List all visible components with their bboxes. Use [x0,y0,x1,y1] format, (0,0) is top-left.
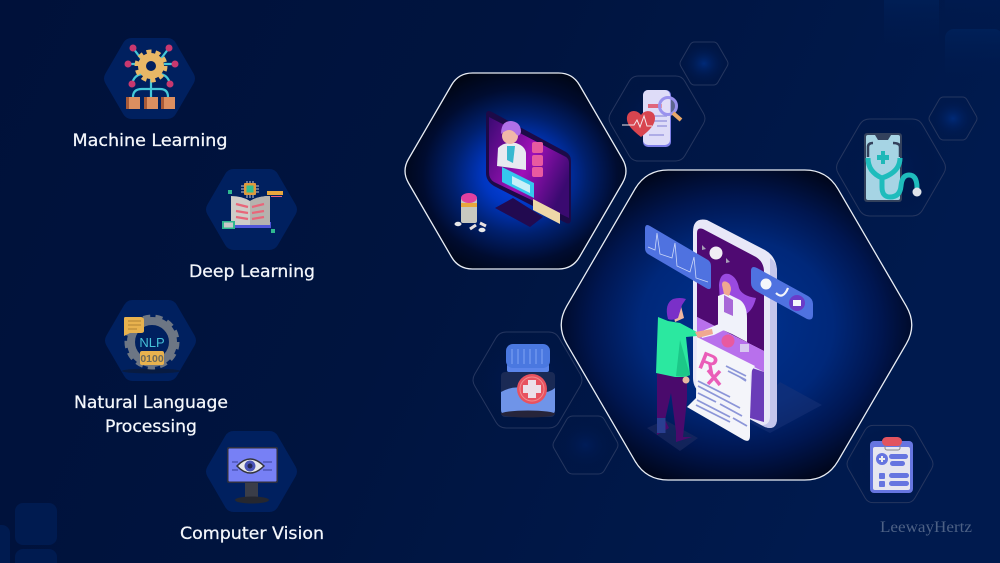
panel: deep learning [189,169,315,281]
icon: clipboard [870,437,913,493]
decorative tiles bottom left [0,503,57,563]
label: Computer Vision [180,524,324,543]
hexagon badge [206,431,297,512]
icon: book with chip [222,181,283,233]
small hexagon: medical report [609,76,705,161]
small hexagon: empty top [680,42,728,85]
roll inside [750,368,764,422]
patient figure [656,298,713,442]
small hexagon: empty lower [553,416,618,474]
label: second line: Processing [105,417,197,436]
label: first line: Natural Language [74,393,228,412]
floor shadow [745,382,822,433]
icon: monitor with eye [227,447,278,504]
icon: gear network [124,44,178,109]
icon: medicine bottle [501,344,555,418]
label: Deep Learning [189,262,315,281]
ECG card [645,225,711,289]
pill bottle and pills [454,193,486,232]
beige card [533,199,560,224]
small hexagon: medicine bottle [473,332,582,428]
prescription sheet [687,337,755,441]
small hexagon: empty right [929,97,977,140]
phone body [693,220,777,428]
panel: machine learning [72,38,228,150]
phone screen [697,228,764,351]
icon: report, heart and magnifier [622,90,681,147]
side icons [532,142,543,177]
cyan card [502,167,534,198]
doctor on phone [700,274,756,342]
doctor on screen [497,121,526,170]
person shadow [647,420,698,451]
small hexagon: clipboard [847,425,933,503]
call icons [722,334,749,352]
monitor screen [486,111,571,224]
large hexagon: telemedicine phone consultation [561,170,912,480]
small hexagon: stethoscope phone [837,119,945,216]
hexagon badge [104,38,195,119]
screen surface [489,117,569,218]
icon: phone with stethoscope [864,133,922,202]
decorative tiles top right [884,0,1000,82]
screen top icons [702,245,730,263]
monitor stand [495,198,543,227]
icon: NLP gear [122,317,180,374]
lavender call bar [697,317,764,372]
Rx mark: R [695,347,722,379]
phone side [762,258,777,428]
brand wordmark: LeewayHertz [880,519,972,536]
hexagon badge [206,169,297,250]
call controls card [751,267,813,320]
panel: computer vision [180,431,324,543]
label: Machine Learning [72,131,228,150]
icon: NLP gear: 0100 [140,353,164,365]
icon: NLP gear: NLP [139,335,165,350]
panel: natural language processing [74,300,228,436]
medium hexagon: telehealth monitor [405,73,626,269]
hexagon badge [105,300,196,381]
